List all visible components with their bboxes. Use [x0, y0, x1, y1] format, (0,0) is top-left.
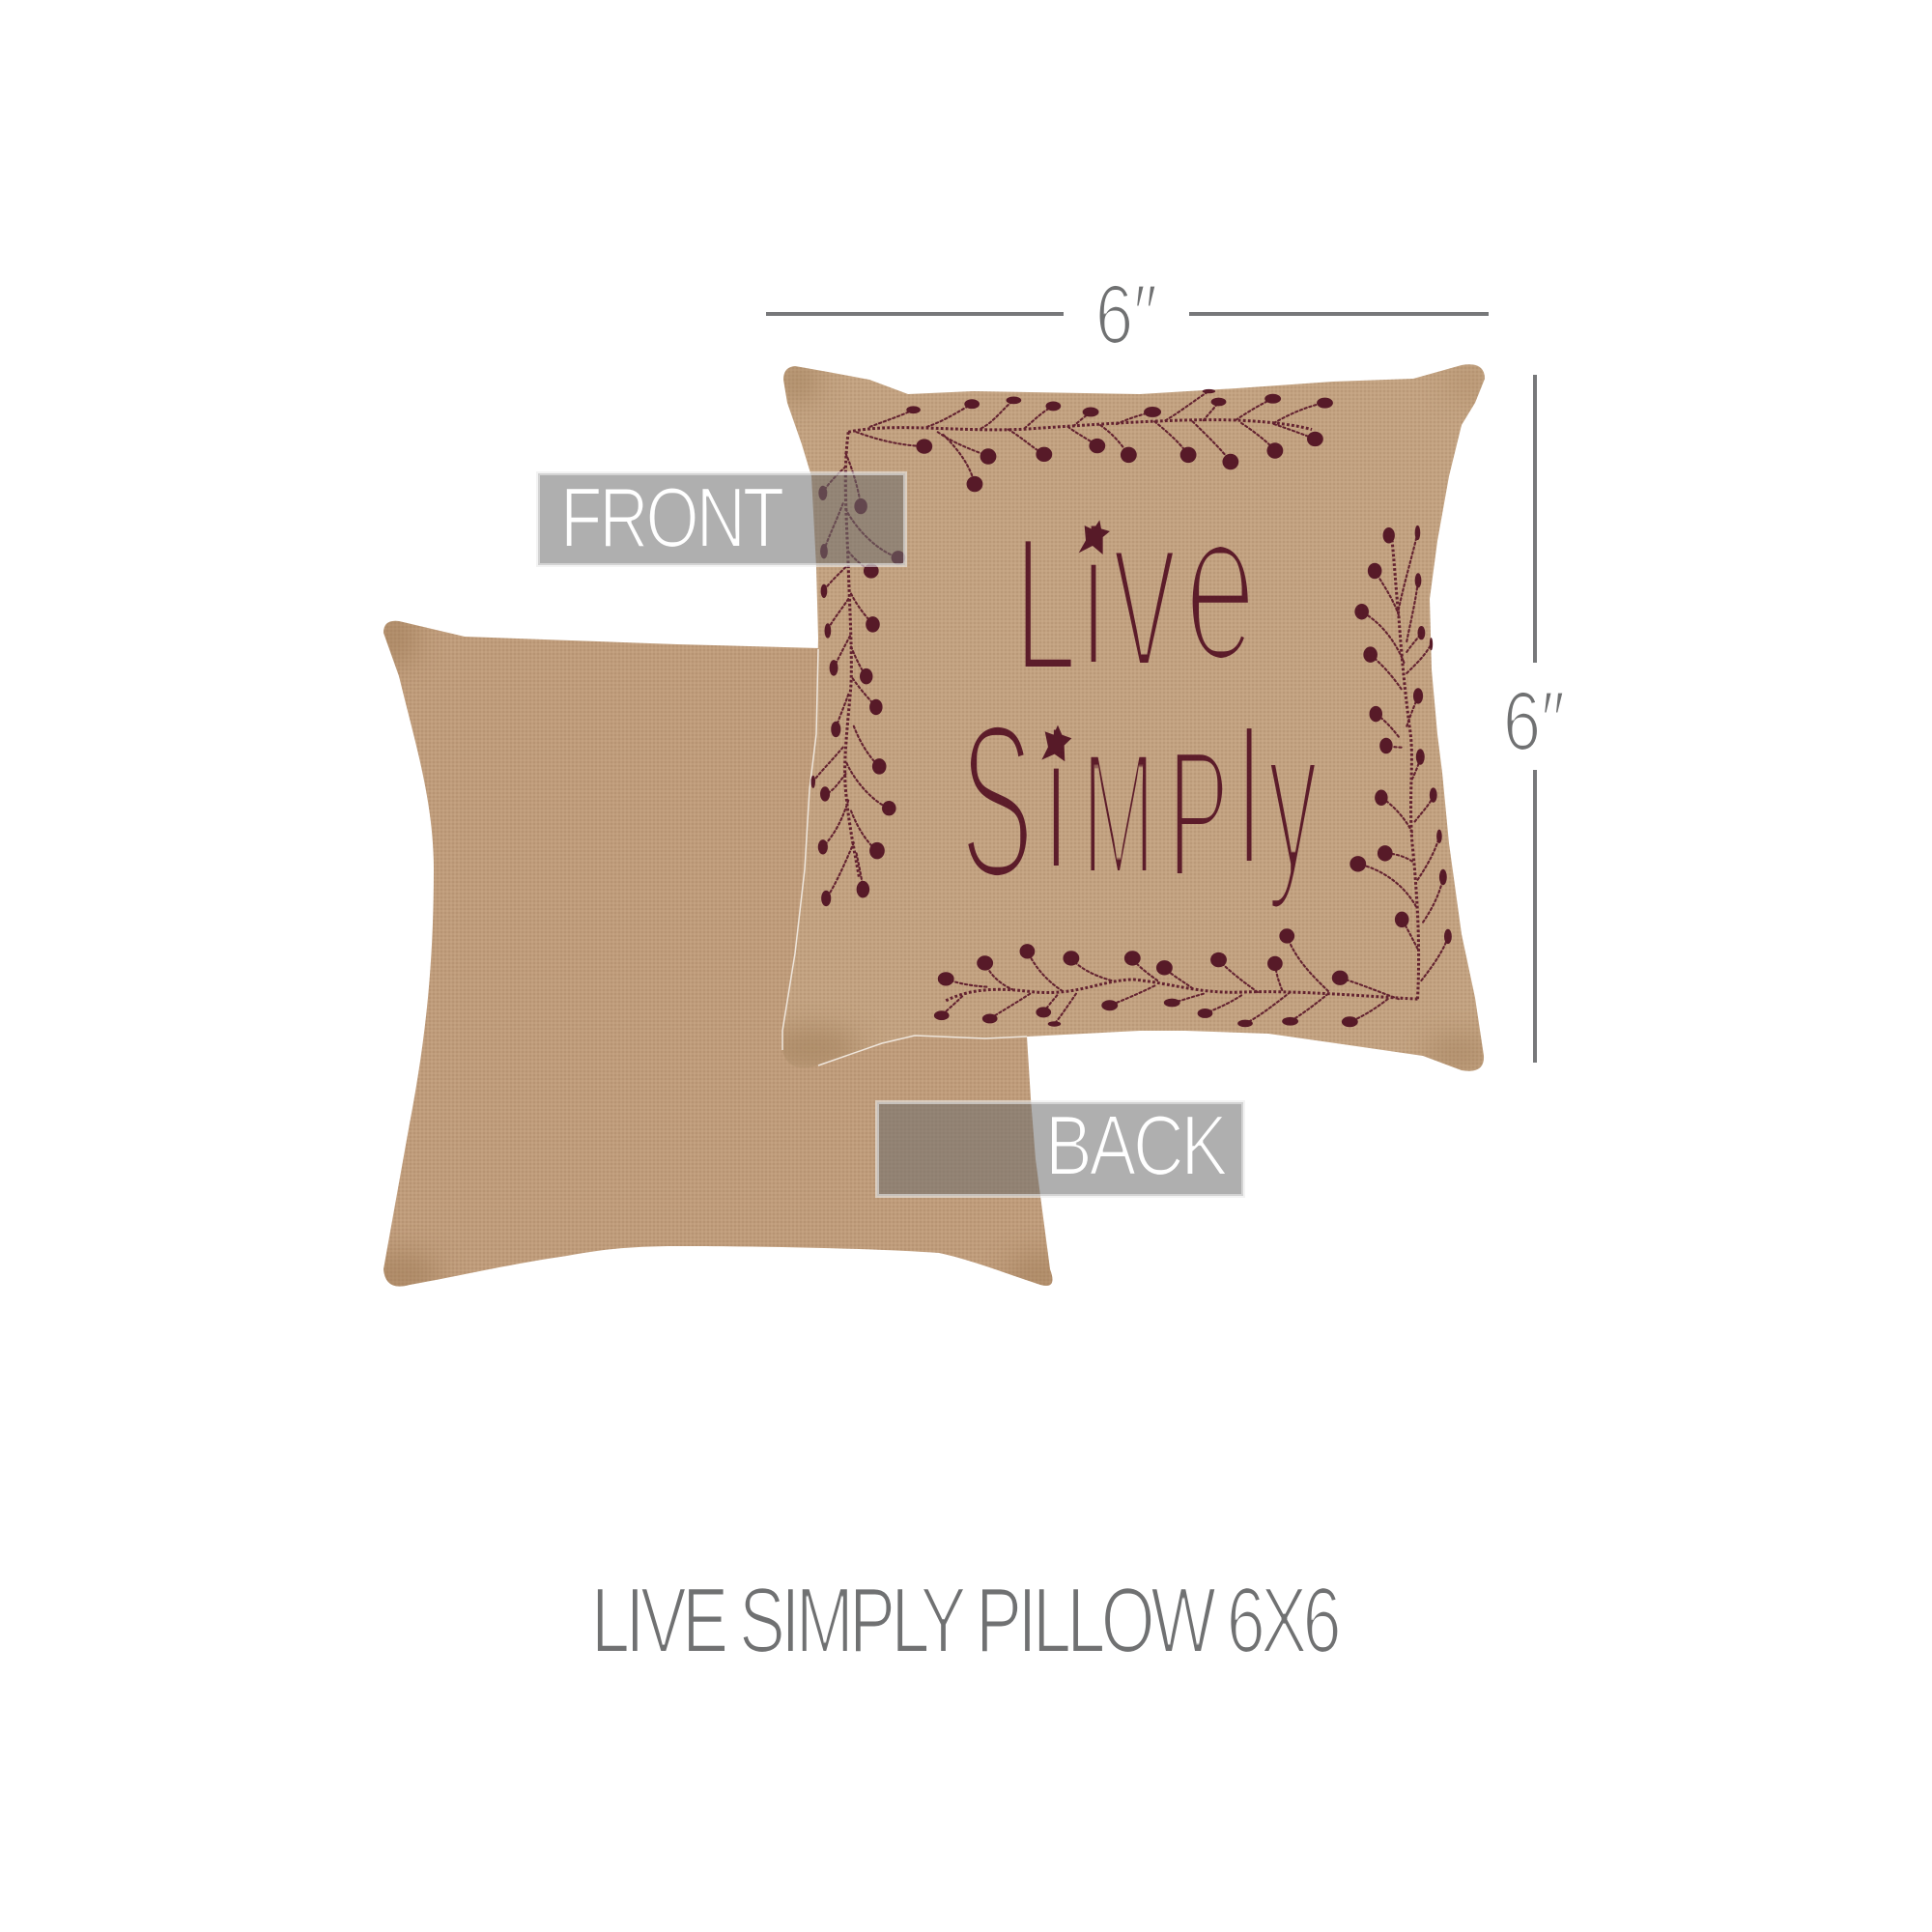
embroidered word: Live: e	[1184, 464, 1257, 707]
label: back	[877, 1097, 1243, 1196]
icon: star above Live	[1079, 520, 1110, 554]
pillow fabric	[763, 357, 1493, 1077]
front pillow	[763, 357, 1493, 1077]
top vine	[848, 391, 1325, 484]
pillow outline	[782, 649, 1027, 1065]
berries	[810, 389, 1452, 1027]
width dimension	[766, 269, 1489, 361]
height dimension	[1503, 375, 1565, 1063]
embroidered word: Simply: l	[1238, 690, 1260, 906]
embroidered word: Live: v	[1111, 467, 1178, 715]
embroidered word: Live: i	[1080, 486, 1107, 708]
title: LIVE SIMPLY PILLOW 6X6	[591, 1569, 1339, 1672]
right vine	[1358, 533, 1448, 999]
embroidered word: Live: L	[1013, 496, 1078, 711]
embroidered word: Simply: P	[1168, 711, 1229, 916]
left vine	[813, 432, 898, 898]
vine embroidery	[810, 389, 1452, 1027]
embroidered word: Simply: S	[960, 679, 1034, 924]
label: front: FRONT	[560, 469, 783, 565]
label: back: BACK	[1045, 1097, 1228, 1193]
embroidered word: Simply: i	[1045, 691, 1067, 912]
back pillow	[384, 620, 1053, 1287]
height dimension: 6″	[1503, 675, 1565, 768]
bottom vine	[942, 936, 1417, 1024]
width dimension: 6″	[1095, 269, 1157, 361]
embroidered word: Simply: M	[1082, 717, 1155, 912]
icon: star above Simply	[1041, 725, 1071, 761]
embroidered word: Simply: y	[1267, 687, 1318, 913]
